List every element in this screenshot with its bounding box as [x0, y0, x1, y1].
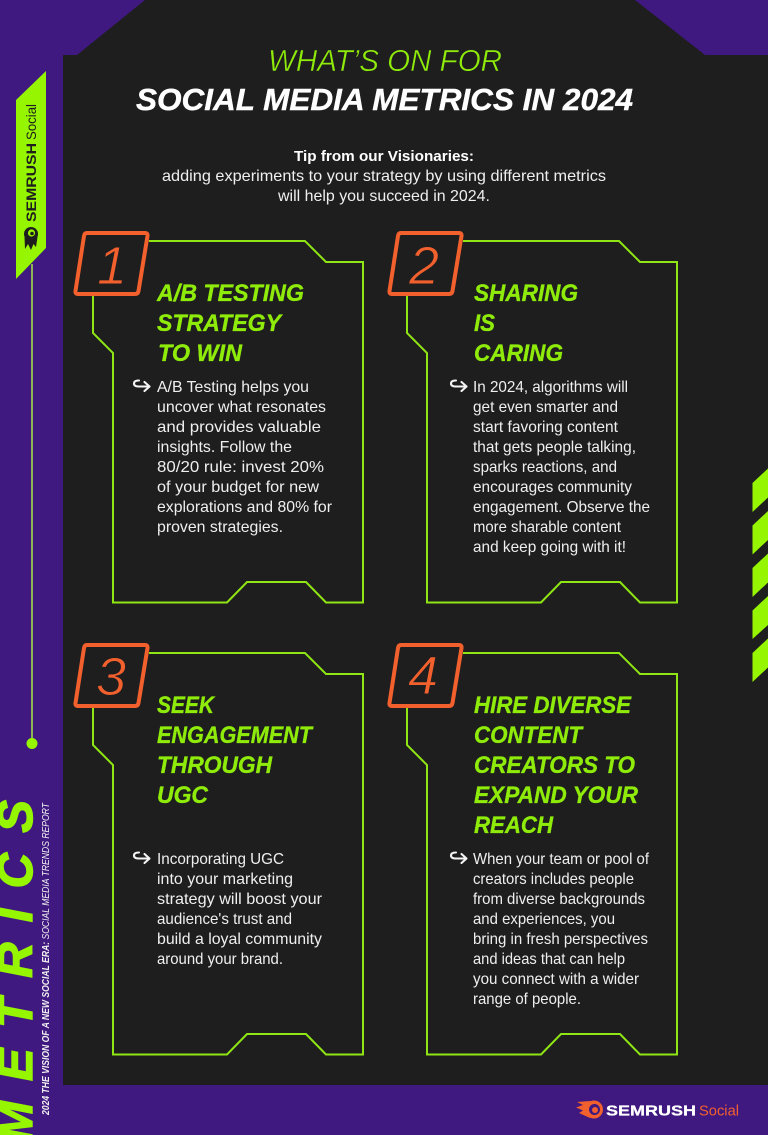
card 3	[75, 645, 363, 1054]
card 3 body: strategy will boost your	[157, 891, 322, 908]
badge 4: 4	[408, 646, 438, 706]
card 4 body	[473, 851, 650, 1008]
card 4 heading: HIRE DIVERSE	[474, 692, 632, 719]
arrow icon	[451, 852, 466, 863]
card 2 body: and keep going with it!	[473, 539, 626, 556]
card 3 body: into your marketing	[157, 871, 293, 888]
card 4 body: from diverse backgrounds	[473, 891, 645, 908]
left brand tab: SEMRUSH	[23, 143, 39, 222]
card 1 frame	[93, 241, 363, 602]
card 1 body: A/B Testing helps you	[157, 379, 309, 396]
card 4 body: bring in fresh perspectives	[473, 931, 648, 948]
card 4 body: and experiences, you	[473, 911, 615, 928]
arrow icon	[134, 852, 150, 863]
card 2 body: get even smarter and	[473, 399, 618, 416]
card 2 body: encourages community	[473, 479, 632, 496]
card 1 body: insights. Follow the	[157, 439, 292, 456]
card 1 body: uncover what resonates	[157, 399, 326, 416]
card 1 body	[157, 379, 332, 536]
right stripes	[752, 468, 768, 682]
card 1	[75, 233, 363, 602]
card 2 body	[473, 379, 650, 556]
card 4 body: When your team or pool of	[473, 851, 650, 868]
card 4 heading: CONTENT	[474, 722, 584, 749]
card 4 heading	[474, 692, 639, 839]
badge 2: 2	[408, 236, 439, 296]
left brand tab	[16, 71, 46, 279]
card 4 heading: EXPAND YOUR	[474, 782, 639, 809]
card 2 body: engagement. Observe the	[473, 499, 650, 516]
card 4 body: range of people.	[473, 991, 581, 1008]
intro tip	[162, 148, 606, 205]
card 1 body: proven strategies.	[157, 519, 283, 536]
badge 2	[389, 233, 462, 296]
intro tip: adding experiments to your strategy by using different metrics	[162, 168, 606, 185]
card 2	[389, 233, 677, 602]
footer logo: Social	[699, 1102, 739, 1120]
card 4 body: you connect with a wider	[473, 971, 639, 988]
footer logo	[576, 1100, 739, 1120]
connector line with dot	[26, 264, 38, 749]
badge 4	[389, 645, 462, 706]
card 3 heading: THROUGH	[157, 752, 273, 779]
vertical report label: 2024 THE VISION OF A NEW SOCIAL ERA: SOCIAL MEDIA TRENDS REPORT	[41, 802, 52, 1116]
card 1 heading	[156, 280, 304, 367]
card 2 body: more sharable content	[473, 519, 622, 536]
card 4 frame	[407, 653, 677, 1054]
card 4 heading: CREATORS TO	[474, 752, 635, 779]
card 3 body	[157, 851, 322, 968]
card 4	[389, 645, 677, 1054]
card 3 body: build a loyal community	[157, 931, 322, 948]
card 3 frame	[93, 653, 363, 1054]
card 2 heading: IS	[474, 310, 495, 337]
card 2 heading	[474, 280, 578, 367]
intro tip: Tip from our Visionaries:	[294, 148, 474, 165]
title: SOCIAL MEDIA METRICS IN 2024	[136, 82, 633, 117]
card 3 heading	[157, 692, 314, 809]
card 2 frame	[407, 241, 677, 602]
card 1 body: of your budget for new	[157, 479, 320, 496]
card 2 body: In 2024, algorithms will	[473, 379, 628, 396]
card 2 body: that gets people talking,	[473, 439, 636, 456]
card 2 heading: SHARING	[474, 280, 578, 307]
title	[136, 43, 633, 117]
card 2 body: sparks reactions, and	[473, 459, 617, 476]
card 1 heading: TO WIN	[158, 340, 243, 367]
card 3 heading: SEEK	[157, 692, 215, 719]
card 4 body: creators includes people	[473, 871, 634, 888]
card 4 heading: REACH	[474, 812, 554, 839]
card 3 heading: ENGAGEMENT	[157, 722, 314, 749]
card 1 body: 80/20 rule: invest 20%	[157, 459, 324, 476]
title: WHAT’S ON FOR	[268, 43, 502, 78]
card 3 body: around your brand.	[157, 951, 283, 968]
arrow icon	[451, 380, 466, 391]
left brand tab: Social	[23, 104, 39, 140]
card 1 body: explorations and 80% for	[157, 499, 332, 516]
footer logo: SEMRUSH	[606, 1102, 696, 1120]
card 1 body: and provides valuable	[157, 419, 321, 436]
card 2 heading: CARING	[474, 340, 563, 367]
arrow icon	[134, 380, 150, 391]
card 3 heading: UGC	[157, 782, 209, 809]
badge 1: 1	[97, 236, 127, 296]
badge 3: 3	[96, 647, 126, 707]
intro tip: will help you succeed in 2024.	[277, 188, 490, 205]
card 1 heading: A/B TESTING	[156, 280, 304, 307]
badge 3	[75, 645, 148, 707]
badge 1	[75, 233, 148, 296]
card 3 body: audience's trust and	[157, 911, 292, 928]
card 4 body: and ideas that can help	[473, 951, 625, 968]
card 1 heading: STRATEGY	[157, 310, 283, 337]
card 3 body: Incorporating UGC	[157, 851, 284, 868]
card 2 body: start favoring content	[473, 419, 619, 436]
